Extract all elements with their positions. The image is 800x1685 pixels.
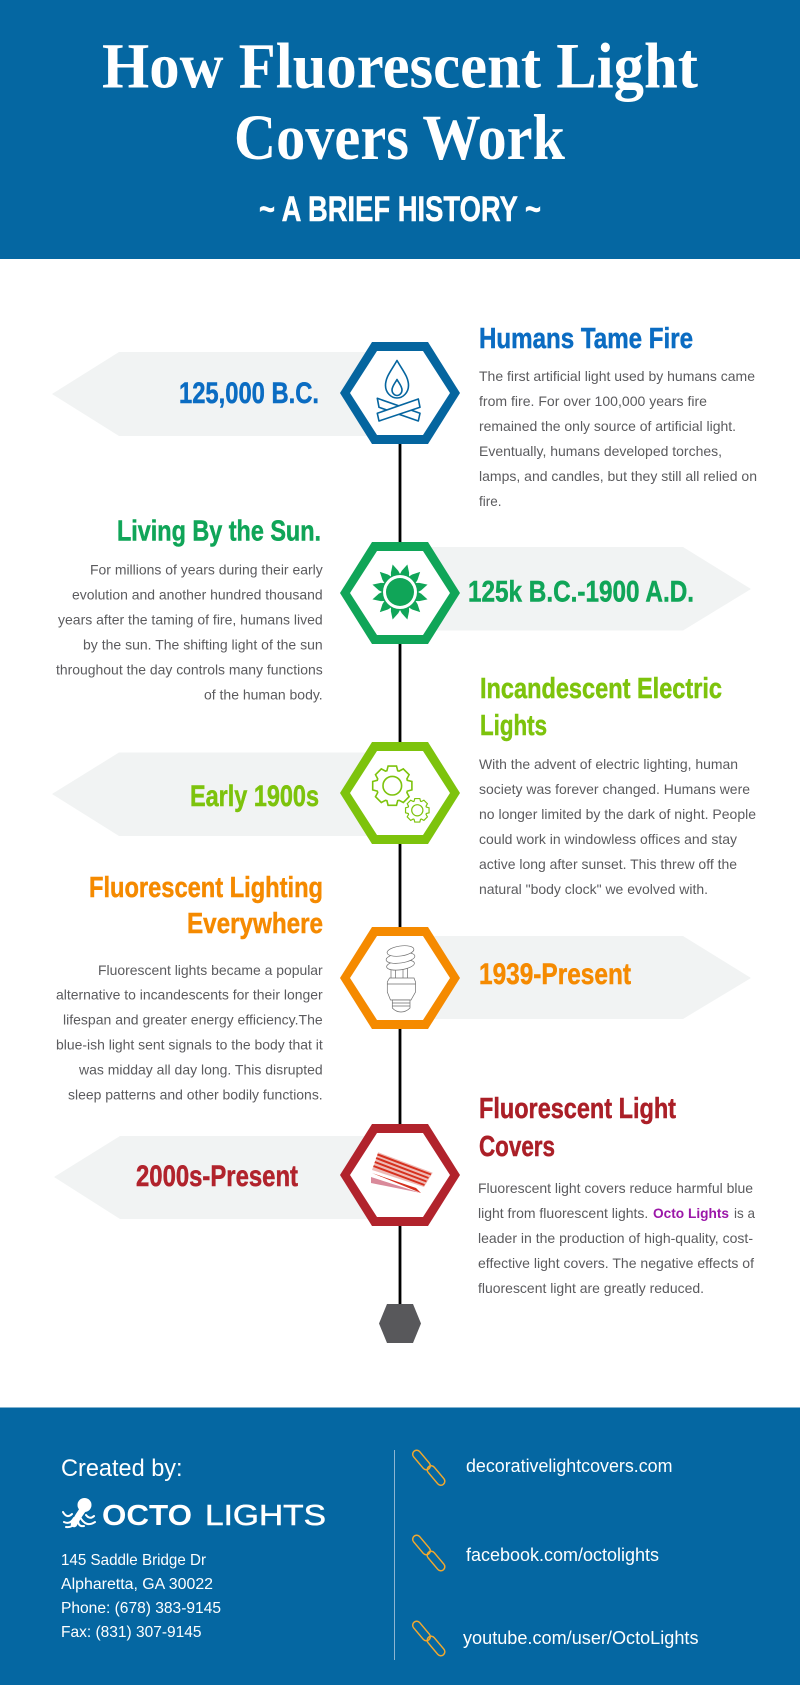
body text: With the advent of electric lighting, human: [479, 756, 738, 772]
hexagon with CFL bulb icon: [340, 927, 460, 1029]
date ribbon: 2000s-Present: 2000s-Present: [136, 1160, 298, 1193]
heading: Humans Tame Fire: [479, 323, 693, 355]
link row: website: decorativelightcovers.com: [466, 1456, 672, 1476]
title: How Fluorescent Light: [102, 30, 698, 102]
heading: [89, 872, 323, 940]
logo wordmark: OCTO: [102, 1500, 192, 1532]
logo wordmark: [102, 1500, 326, 1532]
title: Covers Work: [234, 102, 566, 174]
step 4: fluorescent lighting everywhere: [56, 872, 751, 1102]
link row: website: [411, 1449, 672, 1487]
footer panel: [0, 1408, 800, 1685]
date ribbon: 125k B.C.-1900 A.D.: 125k B.C.-1900 A.D.: [468, 576, 694, 608]
title: [102, 30, 698, 174]
date ribbon: Early 1900s: [52, 752, 400, 836]
body text: [56, 562, 323, 702]
address block: [61, 1552, 221, 1641]
body text: [479, 368, 757, 509]
body text: Fluorescent light covers reduce harmful blue: [478, 1180, 753, 1196]
step 5: fluorescent light covers: [54, 1093, 755, 1296]
body text: lifespan and greater energy efficiency.The: [63, 1012, 323, 1028]
body text: [56, 962, 323, 1102]
body text: lamps, and candles, but they still all relied on: [479, 468, 757, 484]
hexagon with sun icon: [340, 542, 460, 644]
octopus logo icon: [63, 1498, 95, 1527]
created by label: Created by:: [61, 1455, 183, 1482]
body text: fire.: [479, 493, 502, 509]
address block: Fax: (831) 307-9145: [61, 1624, 202, 1641]
hexagon with gears icon: [340, 742, 460, 844]
address block: Phone: (678) 383-9145: [61, 1600, 221, 1617]
body text: was midday all day long. This disrupted: [78, 1062, 323, 1078]
timeline vertical line: [399, 440, 401, 1306]
body text: leader in the production of high-quality, cost-: [478, 1230, 753, 1246]
date ribbon: 125k B.C.-1900 A.D.: [400, 547, 751, 630]
body text: fluorescent light are greatly reduced.: [478, 1280, 704, 1296]
body text: Octo Lights: [653, 1205, 729, 1221]
step 1: humans tame fire: [52, 323, 757, 509]
body text: [478, 1180, 755, 1296]
body text: from fire. For over 100,000 years fire: [479, 393, 707, 409]
body text: no longer limited by the dark of night. People: [479, 806, 756, 822]
logo wordmark: LIGHTS: [205, 1500, 326, 1532]
body text: evolution and another hundred thousand: [72, 586, 323, 602]
date ribbon: Early 1900s: Early 1900s: [190, 780, 319, 813]
heading: Covers: [479, 1131, 555, 1163]
body text: natural "body clock" we evolved with.: [479, 881, 708, 897]
body text: [479, 756, 756, 897]
body text: light from fluorescent lights.: [478, 1205, 648, 1221]
body text: remained the only source of artificial light.: [479, 418, 736, 434]
hexagon with light cover icon: [340, 1124, 460, 1226]
date ribbon: 125,000 B.C.: [52, 352, 400, 436]
body text: alternative to incandescents for their longer: [56, 986, 323, 1002]
date ribbon: 125,000 B.C.: 125,000 B.C.: [179, 377, 319, 410]
body text: The first artificial light used by humans came: [479, 368, 755, 384]
heading: [480, 673, 722, 742]
address block: 145 Saddle Bridge Dr: [61, 1552, 207, 1569]
body text: is a: [734, 1205, 755, 1221]
body text: For millions of years during their early: [90, 562, 323, 578]
body text: sleep patterns and other bodily functions.: [68, 1086, 323, 1102]
heading: Everywhere: [187, 908, 323, 940]
body text: Fluorescent lights became a popular: [98, 962, 323, 978]
step 2: living by the sun: [56, 516, 751, 702]
hexagon with campfire icon: [340, 342, 460, 444]
heading: Lights: [480, 710, 547, 742]
heading: Fluorescent Lighting: [89, 872, 323, 904]
body text: society was forever changed. Humans were: [479, 781, 750, 797]
body text: of the human body.: [204, 686, 323, 702]
body text: throughout the day controls many functions: [56, 662, 323, 678]
link row: youtube: youtube.com/user/OctoLights: [463, 1628, 698, 1648]
heading: Incandescent Electric: [480, 673, 722, 705]
step 3: incandescent electric lights: [52, 673, 756, 897]
link row: facebook: [411, 1534, 659, 1572]
body text: could work in windowless offices and stay: [479, 831, 737, 847]
address block: Alpharetta, GA 30022: [61, 1576, 213, 1593]
timeline end marker: [379, 1304, 421, 1343]
date ribbon: 1939-Present: 1939-Present: [479, 958, 631, 991]
date ribbon: 1939-Present: [400, 936, 751, 1019]
heading: Fluorescent Light: [479, 1093, 676, 1125]
heading: Living By the Sun.: [117, 516, 321, 548]
body text: effective light covers. The negative effects of: [478, 1255, 754, 1271]
header banner: [0, 0, 800, 259]
subtitle: ~ A BRIEF HISTORY ~: [259, 190, 541, 229]
heading: [479, 1093, 676, 1163]
body text: years after the taming of fire, humans lived: [58, 612, 323, 628]
date ribbon: 2000s-Present: [54, 1136, 400, 1219]
link row: youtube: [411, 1620, 698, 1657]
body text: blue-ish light sent signals to the body that it: [56, 1036, 323, 1052]
link row: facebook: facebook.com/octolights: [466, 1545, 659, 1565]
body text: Eventually, humans developed torches,: [479, 443, 722, 459]
body text: active long after sunset. This threw off the: [479, 856, 737, 872]
body text: by the sun. The shifting light of the sun: [83, 636, 323, 652]
